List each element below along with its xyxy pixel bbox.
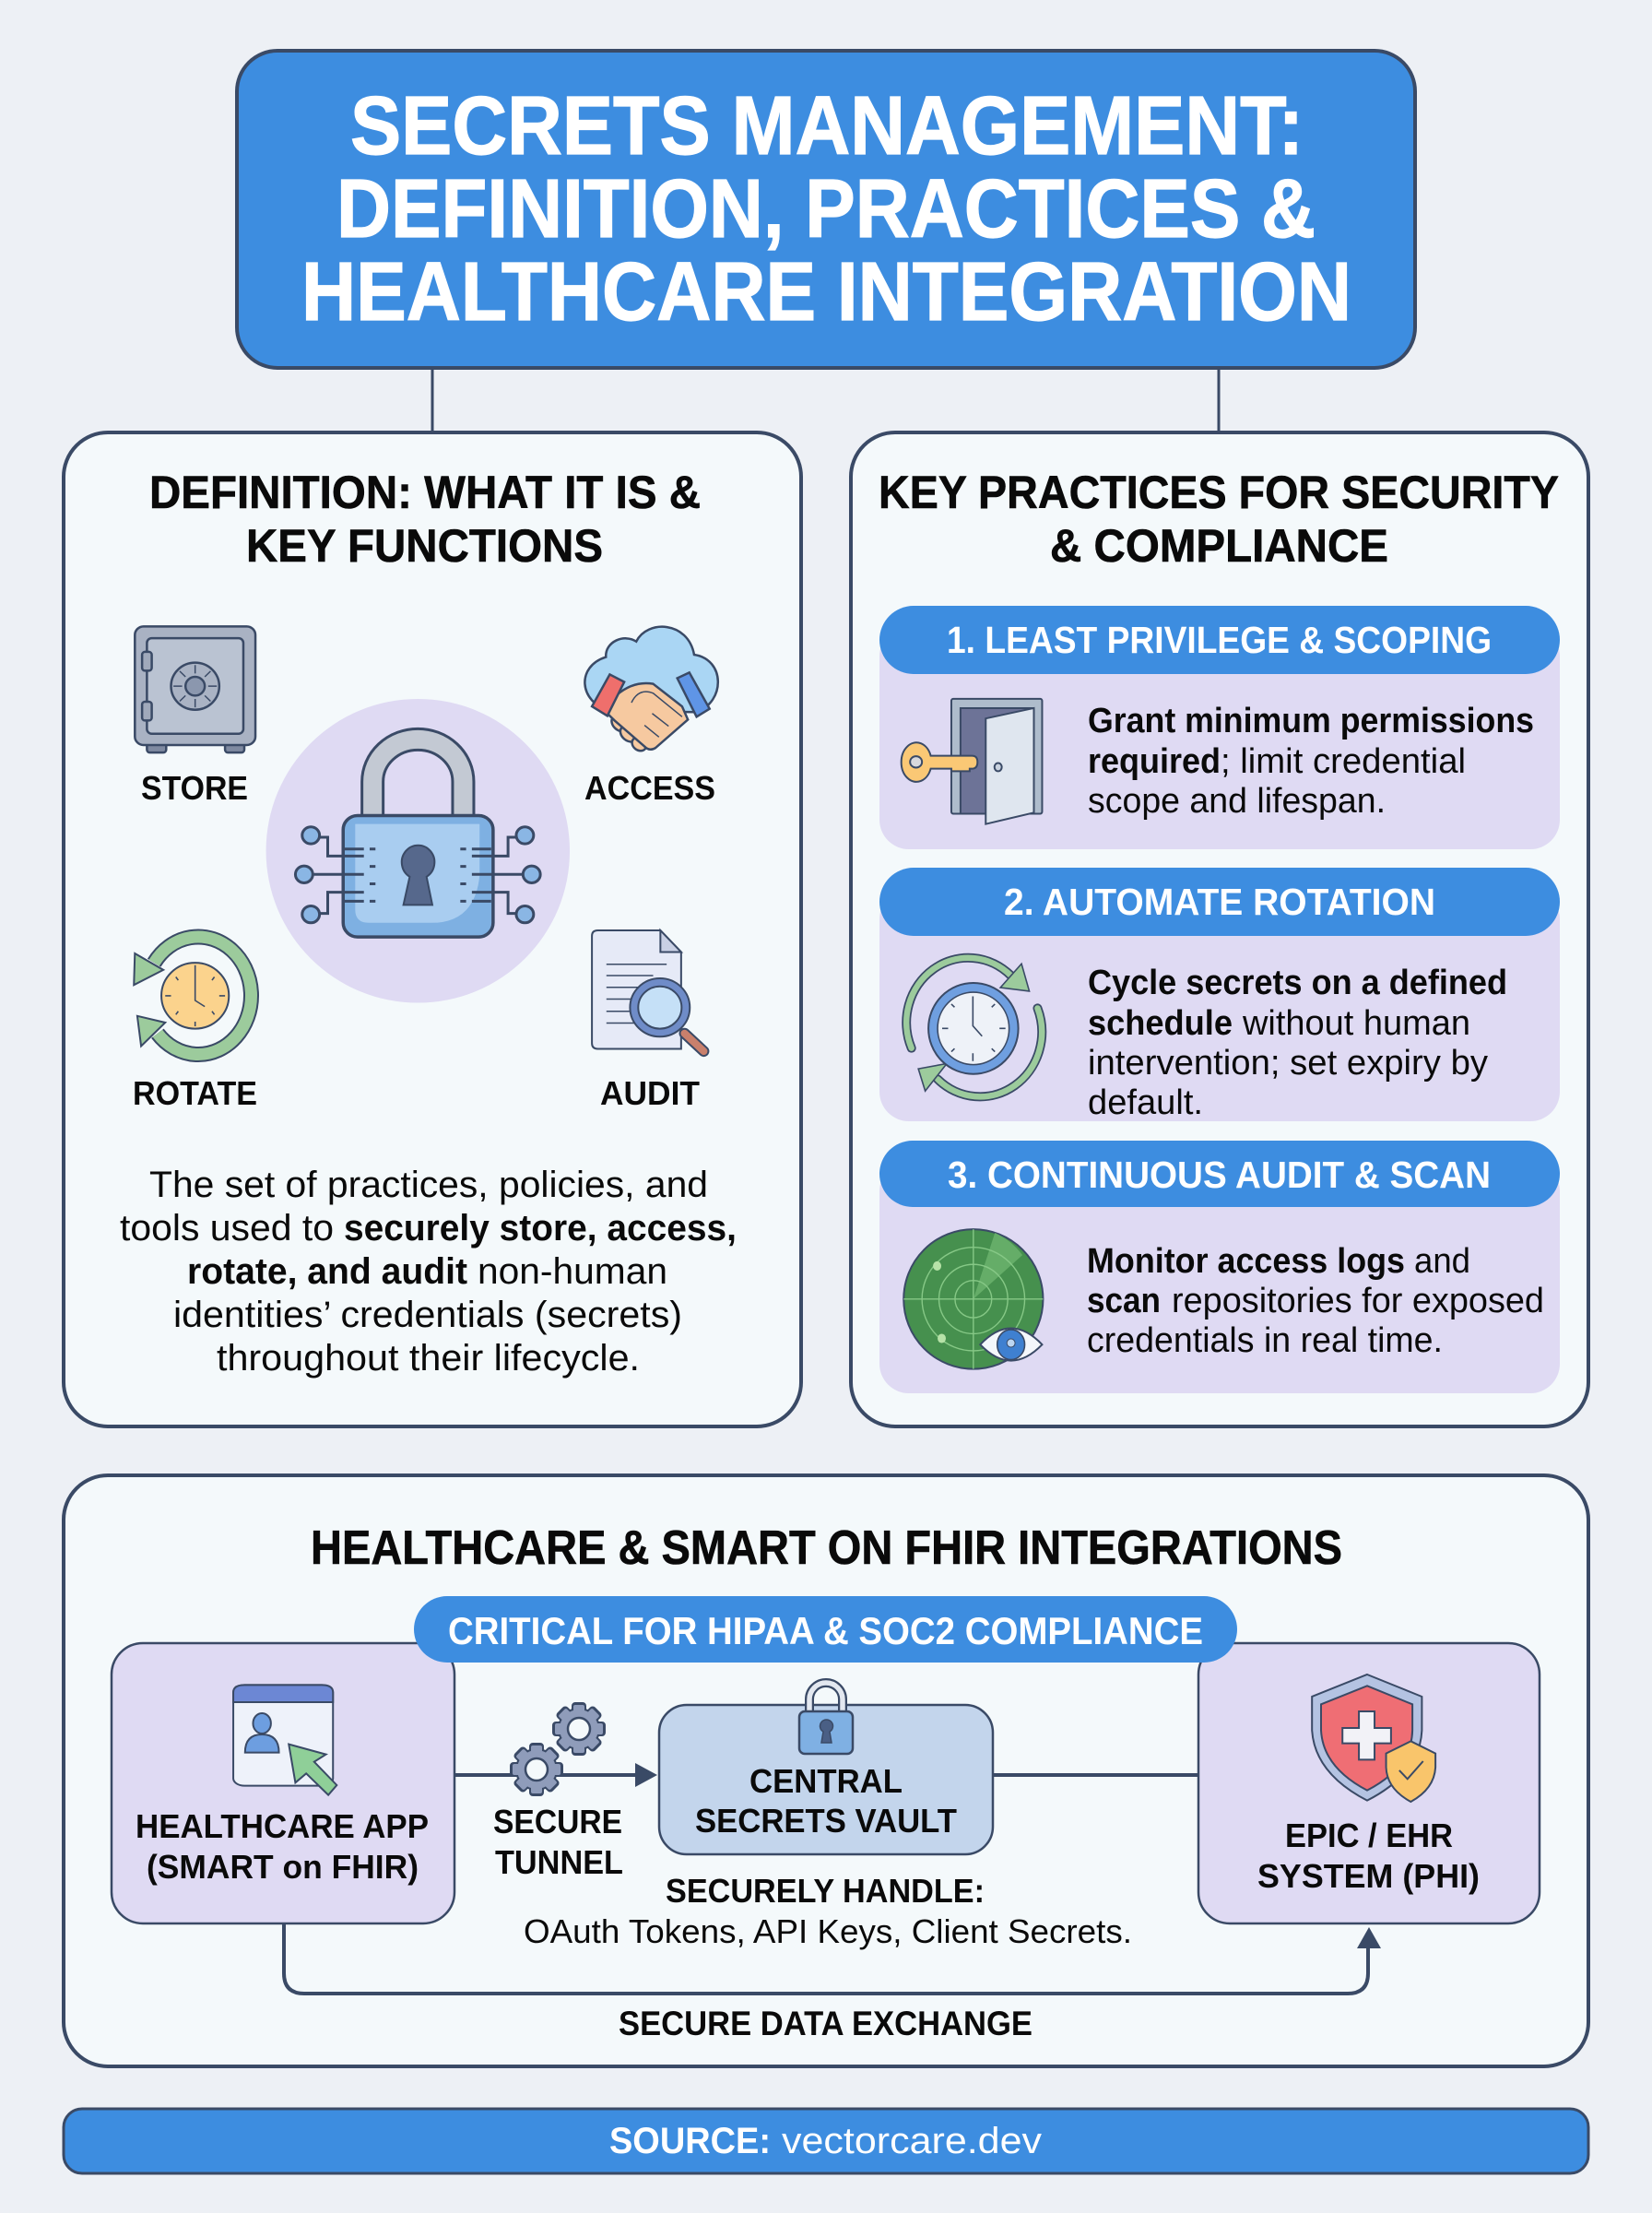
label: healthcare app: (SMART on FHIR)	[147, 1848, 419, 1886]
text: automate rotation: intervention; set expiry by	[1088, 1044, 1488, 1083]
label: healthcare app: HEALTHCARE APP	[136, 1807, 429, 1845]
text: securely handle: SECURELY HANDLE:	[666, 1872, 985, 1910]
arrow: app to vault	[454, 1763, 657, 1787]
definition text: securely store, access,	[344, 1208, 737, 1249]
definition text: throughout their lifecycle.	[217, 1338, 640, 1379]
label: rotate: ROTATE	[133, 1074, 257, 1112]
heading: key practices	[879, 467, 1559, 572]
source bar: vectorcare.dev	[782, 2121, 1042, 2161]
text: least privilege: ; limit credential	[1221, 742, 1466, 781]
text: continuous audit: and	[1414, 1242, 1470, 1281]
text: least privilege: required	[1088, 742, 1221, 781]
text: continuous audit	[1087, 1242, 1544, 1360]
label: EHR system: SYSTEM (PHI)	[1257, 1857, 1480, 1895]
definition text: identities’ credentials (secrets)	[173, 1295, 682, 1335]
card: automate rotation	[879, 868, 1560, 1122]
label: EHR system	[1257, 1817, 1480, 1895]
label: store: STORE	[141, 769, 248, 807]
text: continuous audit: scan	[1087, 1282, 1161, 1320]
box: healthcare app	[112, 1643, 454, 1923]
label: EHR system: EPIC / EHR	[1285, 1817, 1453, 1854]
badge: compliance	[414, 1596, 1237, 1663]
text: automate rotation: schedule	[1088, 1004, 1233, 1043]
card: least privilege: 1. LEAST PRIVILEGE & SCOPING	[947, 619, 1492, 661]
card: least privilege	[879, 606, 1560, 849]
heading: definition: KEY FUNCTIONS	[246, 520, 603, 572]
label: secure tunnel: TUNNEL	[495, 1843, 623, 1881]
text: least privilege: Grant minimum permissions	[1088, 702, 1534, 740]
label: secure tunnel	[493, 1803, 623, 1881]
icon: cloud handshake (access)	[584, 627, 718, 753]
text: securely handle: OAuth Tokens, API Keys, Client Secrets.	[524, 1912, 1132, 1950]
text: automate rotation: without human	[1242, 1004, 1470, 1043]
box: central secrets vault	[659, 1683, 993, 1854]
icon: central padlock with circuits	[266, 699, 570, 1003]
icon: safe (store)	[135, 626, 255, 752]
label: vault	[695, 1762, 957, 1840]
heading: healthcare integrations: HEALTHCARE & SMART ON FHIR INTEGRATIONS	[311, 1521, 1342, 1575]
icon: door and key	[902, 699, 1042, 824]
heading: key practices: KEY PRACTICES FOR SECURITY	[879, 467, 1559, 518]
text: continuous audit: credentials in real time.	[1087, 1321, 1443, 1360]
text: least privilege	[1088, 702, 1534, 821]
text: automate rotation	[1088, 964, 1507, 1122]
icon: clock with rotation arrows	[906, 958, 1042, 1096]
title banner: HEALTHCARE INTEGRATION	[301, 246, 1351, 338]
heading: definition: DEFINITION: WHAT IT IS &	[149, 467, 701, 518]
card: automate rotation: 2. AUTOMATE ROTATION	[1004, 881, 1435, 923]
label: secure tunnel: SECURE	[493, 1803, 622, 1840]
label: vault: CENTRAL	[749, 1762, 903, 1800]
label: healthcare app	[136, 1807, 429, 1886]
icon: clock with arrows (rotate)	[134, 937, 251, 1055]
arrow: secure data exchange	[284, 1923, 1381, 1994]
card: continuous audit: 3. CONTINUOUS AUDIT & SCAN	[948, 1154, 1491, 1196]
text: continuous audit: Monitor access logs	[1087, 1242, 1405, 1281]
box: EHR system	[1198, 1643, 1540, 1923]
definition text: tools used to	[120, 1208, 334, 1249]
text: continuous audit: repositories for exposed	[1172, 1282, 1544, 1320]
icon: app window with cursor	[233, 1685, 336, 1795]
label: access: ACCESS	[584, 769, 715, 807]
text: automate rotation: default.	[1088, 1083, 1203, 1122]
definition text: rotate, and audit	[187, 1251, 467, 1292]
card: continuous audit	[879, 1141, 1560, 1393]
icon: medical shield	[1312, 1675, 1435, 1802]
icon: document with magnifier (audit)	[592, 930, 703, 1051]
heading: definition	[149, 467, 701, 572]
panel: healthcare integrations	[64, 1475, 1588, 2066]
icon: gears	[512, 1704, 604, 1794]
title banner: SECRETS MANAGEMENT:	[350, 80, 1304, 172]
definition text: The set of practices, policies, and	[149, 1165, 708, 1205]
source bar: SOURCE:	[609, 2121, 771, 2161]
text: automate rotation: Cycle secrets on a defined	[1088, 964, 1507, 1002]
label: vault: SECRETS VAULT	[695, 1802, 957, 1840]
icon: vault padlock	[799, 1683, 853, 1754]
definition text	[120, 1165, 737, 1379]
icon: radar and eye	[903, 1229, 1043, 1369]
heading: key practices: & COMPLIANCE	[1050, 520, 1388, 572]
title banner	[237, 51, 1415, 368]
badge: compliance: CRITICAL FOR HIPAA & SOC2 COMPLIANCE	[448, 1609, 1203, 1652]
label: secure data exchange: SECURE DATA EXCHANGE	[619, 2005, 1032, 2042]
definition text: non-human	[478, 1251, 667, 1292]
text: securely handle	[524, 1872, 1132, 1950]
label: audit: AUDIT	[600, 1074, 700, 1112]
title banner: DEFINITION, PRACTICES &	[336, 163, 1316, 255]
connector: vault to EHR	[993, 1773, 1198, 1777]
source bar	[64, 2109, 1588, 2173]
panel: definition	[64, 432, 801, 1426]
text: least privilege: scope and lifespan.	[1088, 782, 1386, 821]
panel: key practices	[851, 432, 1588, 1426]
